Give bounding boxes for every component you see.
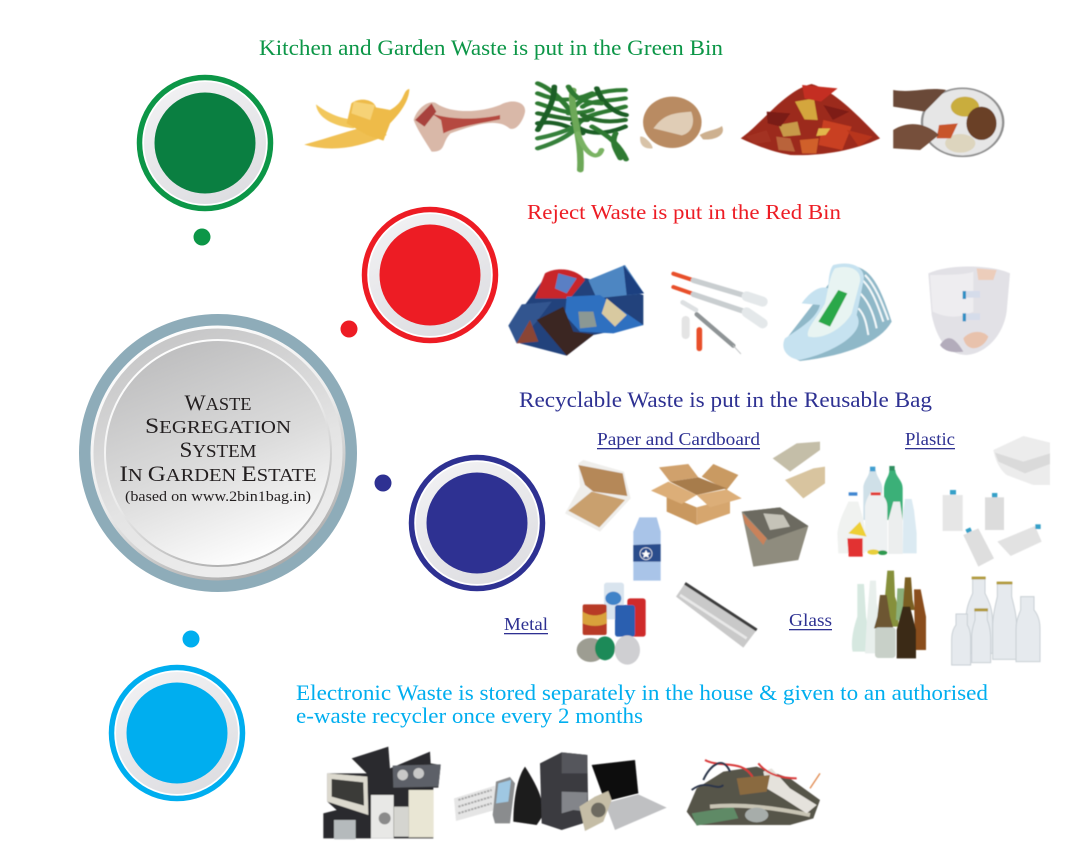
heading: red bin: Reject Waste is put in the Red Bin [527,200,842,224]
icon: syringes [673,274,763,354]
subheading: metal: Metal [504,614,548,634]
central title: SEGREGATION [145,413,291,438]
central title [120,390,317,505]
icon: diaper [928,266,1010,355]
icon: milk carton [633,517,661,581]
icon: plastic cartons [943,490,1042,567]
icon: egg shell [640,97,723,148]
icon: banana peel [304,89,409,148]
central title: SYSTEM [180,437,256,462]
icon: scrap electronics [687,760,820,826]
central title: (based on www.2bin1bag.in) [125,489,311,505]
red bin circle [364,210,496,340]
subheading: glass: Glass [789,610,832,630]
icon: food plate and hands [893,88,1003,156]
recyclable waste images [565,436,1050,665]
heading: green bin: Kitchen and Garden Waste is put in the Green Bin [259,35,723,60]
heading: electronic waste: Electronic Waste is stored separately in the house & given to an authorised [296,680,988,705]
icon: foam clamshell [993,436,1050,485]
icon: stacked old computers [323,747,441,839]
heading: electronic waste [296,680,988,728]
icon: green leaves [538,83,626,170]
icon: coloured glass bottles [852,571,926,658]
heading: electronic waste: e-waste recycler once every 2 months [296,703,643,728]
icon: metal cans [577,583,646,665]
green bin circle [140,78,270,208]
icon: magazine stack [742,507,808,567]
heading: reusable bag: Recyclable Waste is put in the Reusable Bag [519,387,932,412]
icon: cardboard box [651,464,742,525]
icon: bone [414,102,525,152]
blue dot [374,474,392,492]
icon: chip wrappers [508,265,644,356]
reject waste images [508,264,1010,361]
central title: IN GARDEN ESTATE [120,461,317,486]
subheading: paper and cardboard: Paper and Cardboard [597,429,760,449]
kitchen and garden waste images [304,83,1003,170]
reusable bag circle [412,458,542,588]
icon: autumn leaves [741,84,880,155]
icon: sanitary pads [783,264,892,361]
red dot [340,320,358,338]
subheading: plastic: Plastic [905,429,955,449]
e-waste circle [112,668,242,798]
cyan dot [182,630,200,648]
icon: clear glass bottles [952,577,1040,665]
icon: egg cartons [773,442,825,498]
green dot [194,228,210,246]
icon: keyboard, phone, iron, pc, camera and laptop [454,752,667,831]
icon: aluminium foil roll [676,583,757,648]
icon: plastic bottles [837,466,917,557]
icon: pizza box [565,460,631,532]
central circle: waste segregation system [85,320,351,586]
electronic waste images [323,747,820,839]
central title: WASTE [184,390,252,415]
